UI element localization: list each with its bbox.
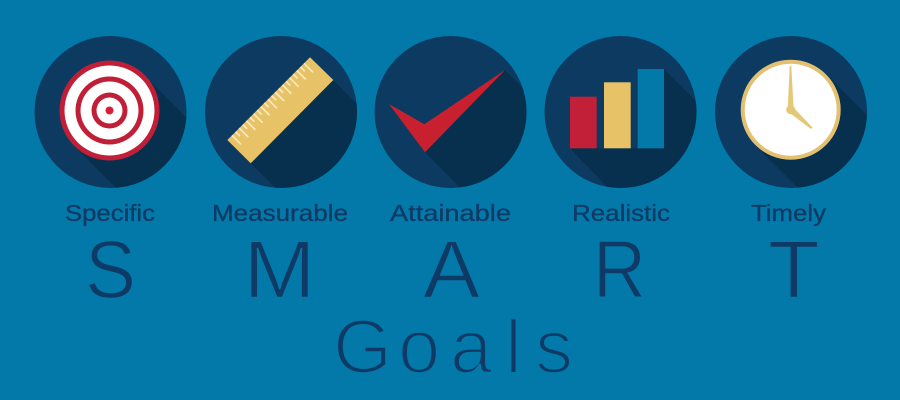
- icon: bar chart: [544, 36, 696, 188]
- letter S: S: [85, 224, 136, 316]
- letter A: A: [423, 224, 480, 316]
- letter T: T: [768, 224, 820, 316]
- label: Measurable: Measurable: [212, 200, 348, 226]
- icon: ruler: [205, 36, 357, 188]
- SMART goals infographic: [34, 36, 867, 372]
- label: Attainable: Attainable: [390, 200, 511, 226]
- label: Specific: Specific: [65, 200, 155, 226]
- red bar: [570, 97, 597, 148]
- icon: target: [34, 36, 186, 188]
- label: Realistic: Realistic: [572, 200, 670, 226]
- icon: clock: [715, 36, 867, 188]
- blue bar: [638, 69, 664, 148]
- icon: check mark: [374, 36, 526, 188]
- label: Timely: Timely: [751, 200, 827, 226]
- letter R: R: [593, 224, 646, 316]
- letter M: M: [244, 224, 316, 316]
- title: Goals: Goals: [333, 305, 573, 390]
- yellow bar: [604, 82, 631, 148]
